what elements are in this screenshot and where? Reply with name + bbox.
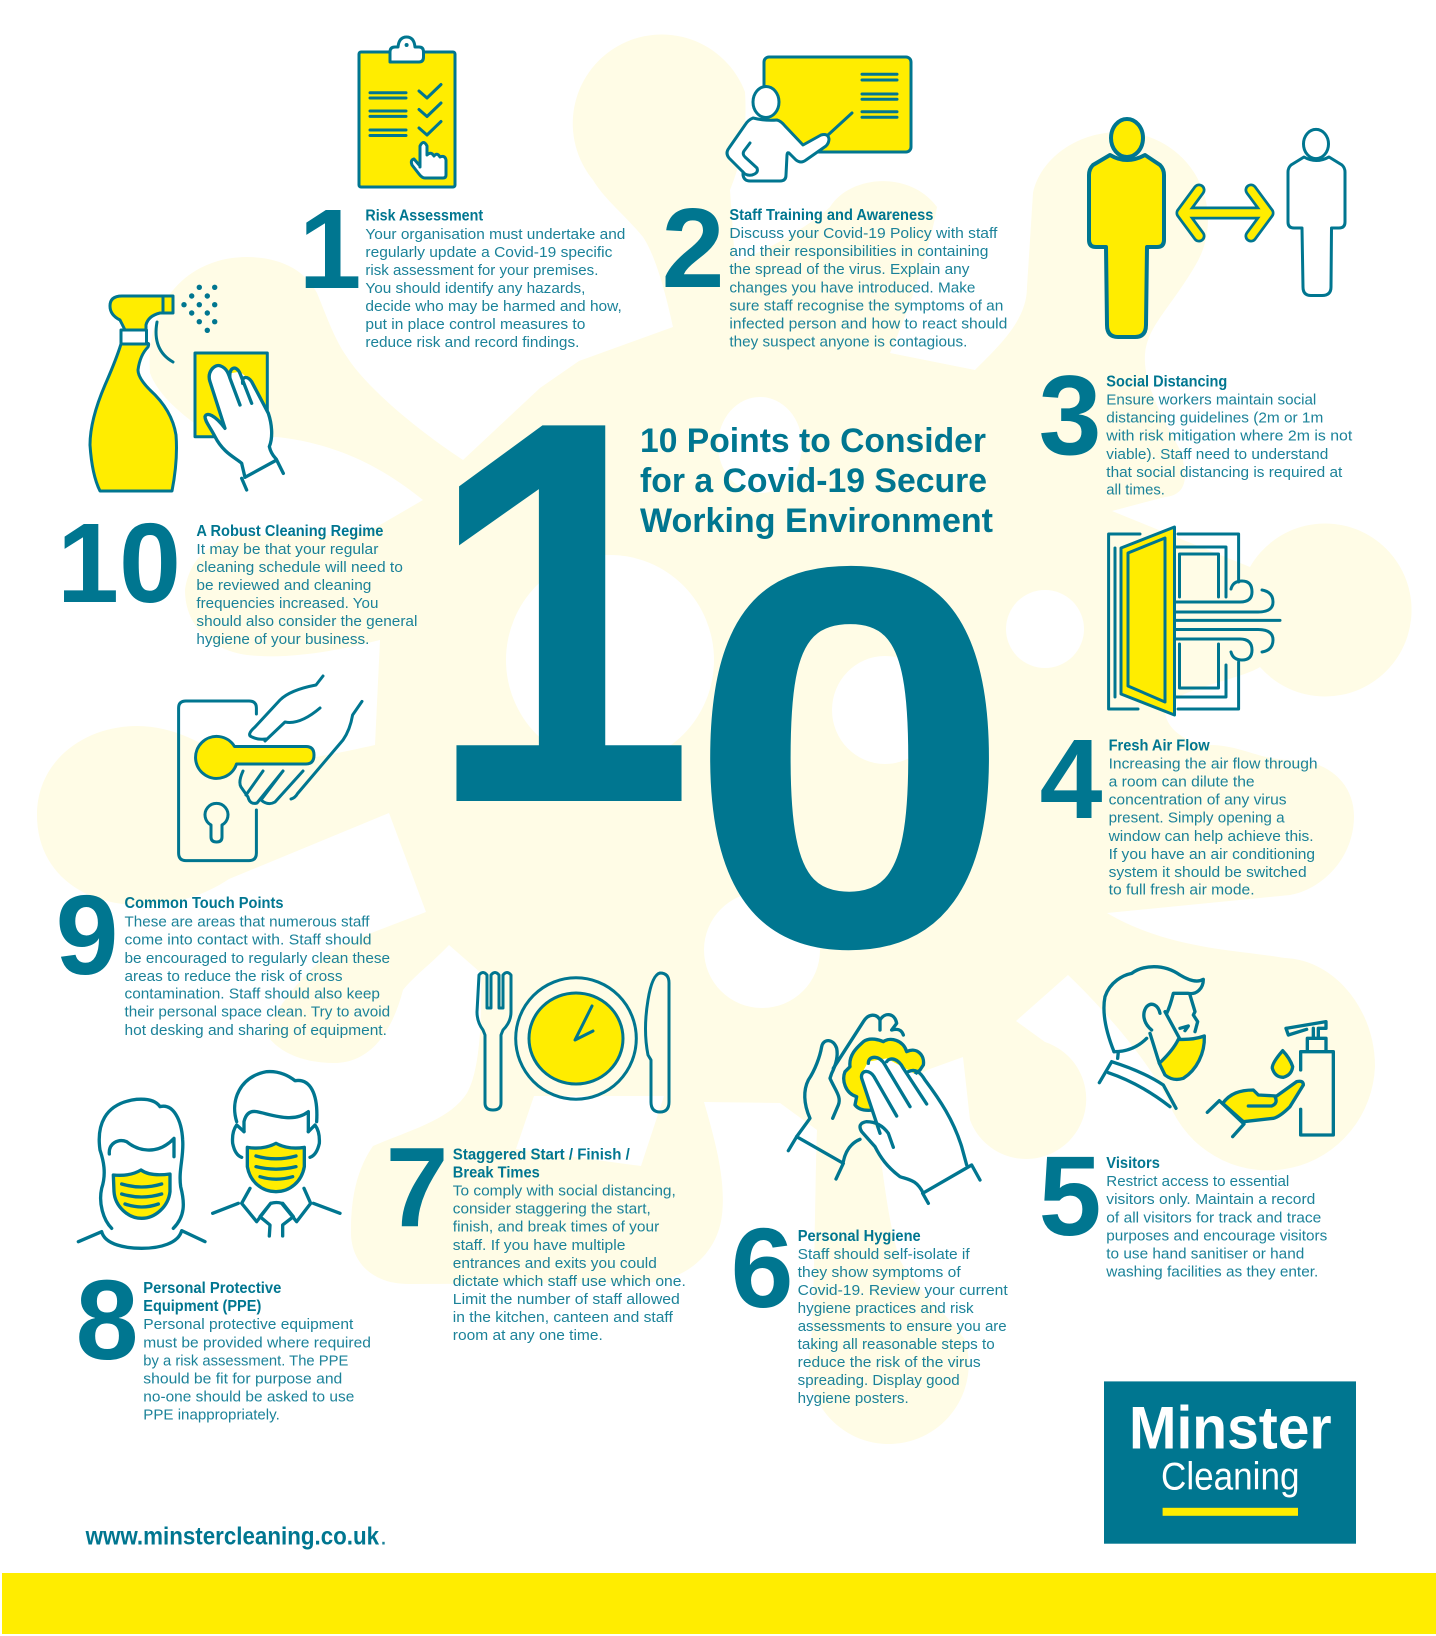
body text: all times. <box>1106 482 1165 499</box>
panel: 9 common touch points <box>56 676 390 1039</box>
body text: hygiene of your business. <box>196 631 369 648</box>
body text: If you have an air conditioning <box>1109 846 1315 863</box>
body text: PPE inappropriately. <box>143 1406 280 1423</box>
number 2: 2 <box>662 185 724 311</box>
title: 10 Points to Consider <box>640 422 986 460</box>
heading: Equipment (PPE) <box>143 1298 261 1315</box>
heading: Risk Assessment <box>365 208 483 225</box>
heading: Staggered Start / Finish / <box>453 1146 630 1163</box>
body text <box>196 541 417 648</box>
logo: Minster Cleaning: Cleaning <box>1161 1456 1300 1499</box>
body text: system it should be switched <box>1109 864 1307 881</box>
logo: Minster Cleaning <box>1104 1381 1356 1544</box>
giant number 10: 0 <box>687 454 1013 1061</box>
body text: Personal protective equipment <box>143 1316 354 1333</box>
body text: areas to reduce the risk of cross <box>124 968 342 985</box>
body text: staff. If you have multiple <box>453 1237 625 1254</box>
icon: hands washing with soap <box>788 1015 980 1203</box>
body text: sure staff recognise the symptoms of an <box>729 297 1003 314</box>
body text: consider staggering the start, <box>453 1201 651 1218</box>
heading <box>453 1146 630 1181</box>
body text: their personal space clean. Try to avoid <box>124 1004 390 1021</box>
body text: be encouraged to regularly clean these <box>124 950 390 967</box>
body text: reduce risk and record findings. <box>365 334 579 351</box>
body text: hygiene posters. <box>798 1390 909 1407</box>
panel: 2 staff training <box>662 57 1007 350</box>
body text <box>365 226 625 351</box>
icon: spray bottle and cloth <box>90 285 283 491</box>
logo: Minster Cleaning: Minster <box>1129 1395 1332 1462</box>
heading: Staff Training and Awareness <box>729 207 933 224</box>
panel: 3 social distancing <box>1039 119 1353 499</box>
body text: by a risk assessment. The PPE <box>143 1352 348 1369</box>
body text: regularly update a Covid-19 specific <box>365 244 613 261</box>
body text: You should identify any hazards, <box>365 280 585 297</box>
panel: 1 risk assessment <box>299 37 625 351</box>
giant number 10 <box>426 307 1013 1061</box>
body text: the spread of the virus. Explain any <box>729 261 970 278</box>
website address: www.minstercleaning.co.uk <box>85 1522 379 1550</box>
body text: entrances and exits you could <box>453 1255 657 1272</box>
body text: finish, and break times of your <box>453 1219 659 1236</box>
heading: Social Distancing <box>1106 374 1227 390</box>
body text: assessments to ensure you are <box>798 1318 1007 1335</box>
body text: Discuss your Covid-19 Policy with staff <box>729 225 998 242</box>
heading <box>143 1280 282 1315</box>
icon: clipboard checklist <box>359 37 455 187</box>
body text: to full fresh air mode. <box>1109 882 1255 899</box>
panel: 6 personal hygiene <box>731 1015 1009 1407</box>
body text: to use hand sanitiser or hand <box>1106 1245 1304 1262</box>
body text <box>729 225 1007 350</box>
body text: purposes and encourage visitors <box>1106 1227 1327 1244</box>
body text: present. Simply opening a <box>1109 810 1285 827</box>
title: for a Covid-19 Secure <box>640 462 987 500</box>
number 10: 10 <box>57 500 181 626</box>
heading: Visitors <box>1106 1155 1160 1172</box>
body text: These are areas that numerous staff <box>124 914 370 931</box>
website address: . <box>380 1522 387 1550</box>
body text: reduce the risk of the virus <box>798 1354 981 1371</box>
body text: be reviewed and cleaning <box>196 577 371 594</box>
heading: Fresh Air Flow <box>1109 737 1210 754</box>
panel: 7 staggered start <box>386 972 686 1344</box>
icon: clock on a plate with cutlery <box>477 972 669 1112</box>
body text <box>453 1182 686 1344</box>
heading: Personal Protective <box>143 1280 282 1297</box>
body text: contamination. Staff should also keep <box>124 986 380 1003</box>
body text: of all visitors for track and trace <box>1106 1209 1321 1226</box>
body text: put in place control measures to <box>365 316 585 333</box>
icon: presenter at board <box>727 57 911 181</box>
body text: risk assessment for your premises. <box>365 262 598 279</box>
body text: frequencies increased. You <box>196 595 378 612</box>
body text: should also consider the general <box>196 613 417 630</box>
body text: window can help achieve this. <box>1108 828 1314 845</box>
body text <box>798 1246 1009 1407</box>
heading: A Robust Cleaning Regime <box>196 523 384 540</box>
body text: decide who may be harmed and how, <box>365 298 622 315</box>
body text: Increasing the air flow through <box>1109 756 1318 772</box>
number 5: 5 <box>1039 1133 1101 1259</box>
icon: open window with wind <box>1109 527 1280 715</box>
number 7: 7 <box>386 1124 448 1250</box>
number 1: 1 <box>299 186 361 312</box>
bottom yellow bar <box>2 1573 1436 1634</box>
icon: two people with arrow <box>1089 119 1345 337</box>
body text: dictate which staff use which one. <box>453 1273 686 1290</box>
number 3: 3 <box>1039 352 1101 478</box>
body text: Covid-19. Review your current <box>798 1282 1009 1299</box>
giant number 10: 1 <box>426 307 695 917</box>
body text: no-one should be asked to use <box>143 1388 354 1406</box>
body text <box>143 1316 371 1423</box>
panel: 5 visitors <box>1039 967 1333 1280</box>
body text: Your organisation must undertake and <box>365 226 625 243</box>
body text: concentration of any virus <box>1109 792 1287 809</box>
body text: infected person and how to react should <box>729 316 1007 332</box>
title <box>640 422 993 540</box>
body text: Staff should self-isolate if <box>798 1246 971 1263</box>
body text: should be fit for purpose and <box>143 1370 342 1387</box>
body text: that social distancing is required at <box>1106 464 1343 481</box>
number 9: 9 <box>56 872 118 998</box>
body text: in the kitchen, canteen and staff <box>453 1309 674 1326</box>
body text: they suspect anyone is contagious. <box>729 334 967 350</box>
panel: 10 cleaning regime <box>57 285 417 648</box>
panel: 8 ppe <box>76 1072 371 1423</box>
heading: Personal Hygiene <box>798 1228 921 1245</box>
body text: they show symptoms of <box>798 1264 962 1281</box>
body text: spreading. Display good <box>798 1372 960 1389</box>
heading: Common Touch Points <box>124 895 284 912</box>
body text: with risk mitigation where 2m is not <box>1105 428 1353 445</box>
body text: and their responsibilities in containing <box>729 243 988 260</box>
body text: visitors only. Maintain a record <box>1106 1191 1315 1208</box>
body text: Limit the number of staff allowed <box>453 1291 680 1308</box>
body text: come into contact with. Staff should <box>124 932 372 949</box>
body text: must be provided where required <box>143 1334 371 1351</box>
body text: distancing guidelines (2m or 1m <box>1106 410 1323 427</box>
number 4: 4 <box>1040 716 1103 842</box>
body text: To comply with social distancing, <box>453 1182 676 1200</box>
body text: changes you have introduced. Make <box>729 279 975 296</box>
number 6: 6 <box>731 1205 793 1331</box>
body text: Restrict access to essential <box>1106 1173 1289 1190</box>
body text <box>1108 756 1318 899</box>
body text: It may be that your regular <box>196 541 378 558</box>
body text <box>1105 392 1353 499</box>
body text: hot desking and sharing of equipment. <box>124 1022 387 1039</box>
icon: two masked people <box>78 1072 340 1248</box>
body text: taking all reasonable steps to <box>798 1336 995 1353</box>
icon: hand on door handle <box>179 676 362 861</box>
number 8: 8 <box>76 1257 138 1383</box>
body text: room at any one time. <box>453 1327 603 1344</box>
title: Working Environment <box>640 502 993 540</box>
icon: masked visitor and hand sanitiser <box>1099 967 1333 1137</box>
body text: washing facilities as they enter. <box>1105 1263 1318 1280</box>
body text: cleaning schedule will need to <box>196 559 403 576</box>
body text: Ensure workers maintain social <box>1106 392 1316 409</box>
body text <box>124 914 390 1039</box>
body text: viable). Staff need to understand <box>1106 446 1328 463</box>
body text: a room can dilute the <box>1109 774 1255 791</box>
panel: 4 fresh air flow <box>1040 527 1318 899</box>
heading: Break Times <box>453 1164 540 1181</box>
body text <box>1105 1173 1327 1280</box>
body text: hygiene practices and risk <box>798 1300 974 1317</box>
